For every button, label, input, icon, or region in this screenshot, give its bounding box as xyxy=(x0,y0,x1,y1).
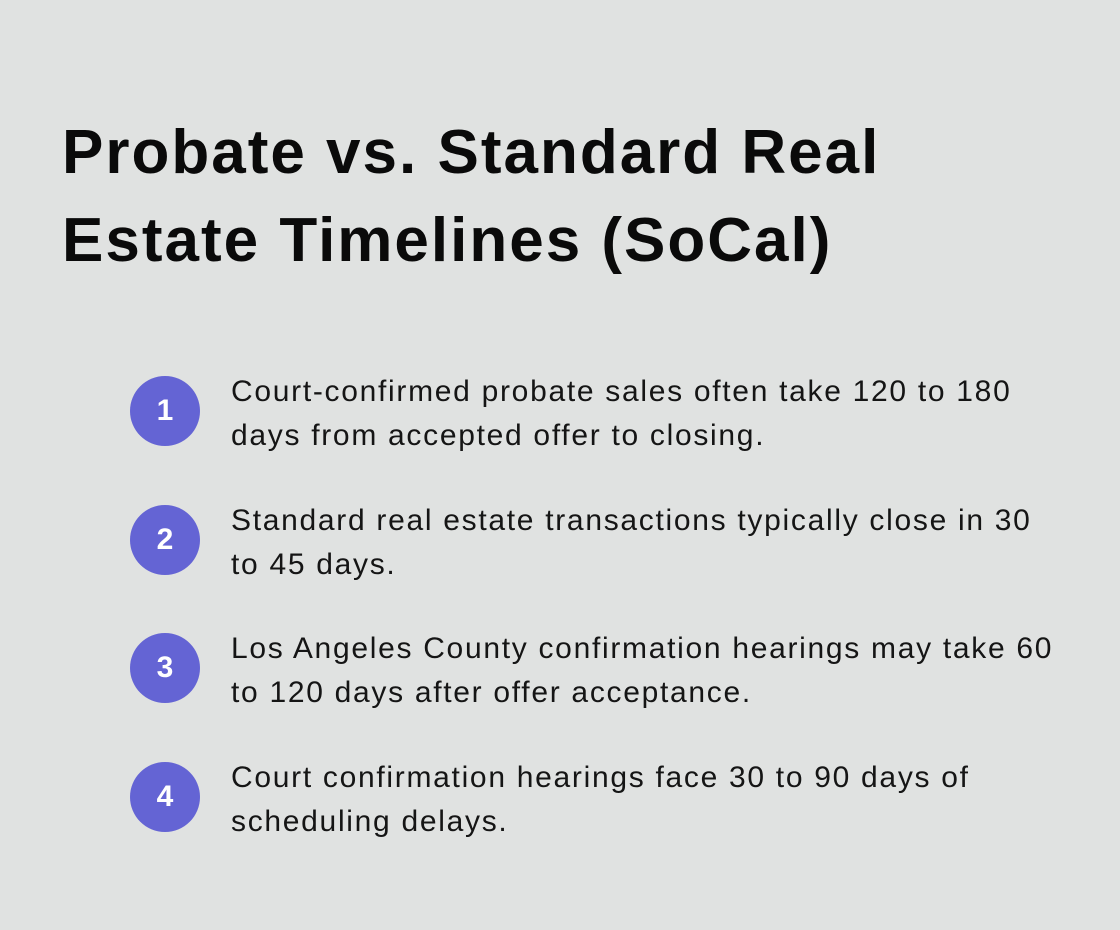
item 2 xyxy=(130,504,1032,581)
text 3: Los Angeles County confirmation hearings may take 60 xyxy=(231,632,1053,665)
icon: number 4: 4 xyxy=(157,780,173,813)
text 1 xyxy=(231,375,1011,452)
title: Probate vs. Standard Real xyxy=(62,118,880,187)
icon: number 3 xyxy=(130,633,200,703)
text 1: days from accepted offer to closing. xyxy=(231,419,765,452)
text 4 xyxy=(231,761,970,838)
icon: number 1 xyxy=(130,376,200,446)
icon: number 2: 2 xyxy=(157,523,173,556)
text 3 xyxy=(231,632,1053,709)
text 2: Standard real estate transactions typically close in 30 xyxy=(231,504,1032,537)
title: Estate Timelines (SoCal) xyxy=(62,206,832,275)
text 4: Court confirmation hearings face 30 to 90 days of xyxy=(231,761,970,794)
text 3: to 120 days after offer acceptance. xyxy=(231,676,752,709)
icon: number 4 xyxy=(130,762,200,832)
text 2 xyxy=(231,504,1032,581)
item 3 xyxy=(130,632,1053,709)
icon: number 3: 3 xyxy=(157,651,173,684)
item 1 xyxy=(130,375,1011,452)
title xyxy=(62,118,880,275)
icon: number 1: 1 xyxy=(157,394,173,427)
item 4 xyxy=(130,761,970,838)
text 1: Court-confirmed probate sales often take 120 to 180 xyxy=(231,375,1011,408)
text 4: scheduling delays. xyxy=(231,805,508,838)
icon: number 2 xyxy=(130,505,200,575)
text 2: to 45 days. xyxy=(231,548,396,581)
